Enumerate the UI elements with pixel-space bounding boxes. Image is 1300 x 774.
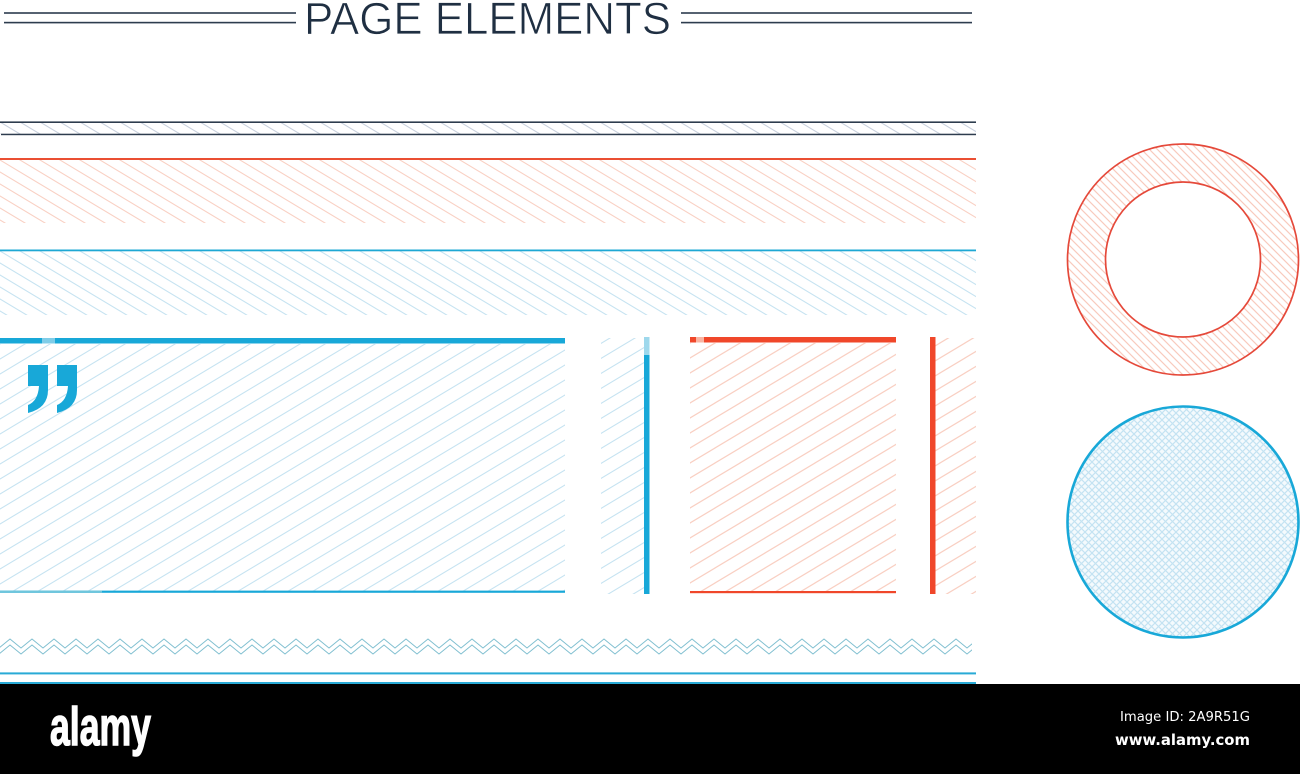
website: www.alamy.com	[1115, 731, 1250, 749]
panel: blue narrow sidebar	[601, 337, 650, 594]
logo: alamy: alamy	[50, 697, 151, 757]
blue cross-hatched circle	[1068, 406, 1298, 638]
red hatched ring	[1068, 144, 1298, 375]
image id: Image ID: 2A9R51G	[1120, 709, 1250, 725]
icon: quotation marks	[28, 365, 77, 413]
panel: red square box	[690, 337, 896, 593]
footer bar	[0, 684, 1300, 774]
panel: red narrow sidebar	[930, 337, 976, 594]
red hatched band	[0, 158, 976, 223]
blue hatched band	[0, 250, 976, 315]
zigzag divider	[0, 637, 972, 656]
double blue rule	[0, 672, 976, 684]
navy hatched band	[0, 121, 976, 135]
panel: blue quote box	[0, 338, 565, 593]
